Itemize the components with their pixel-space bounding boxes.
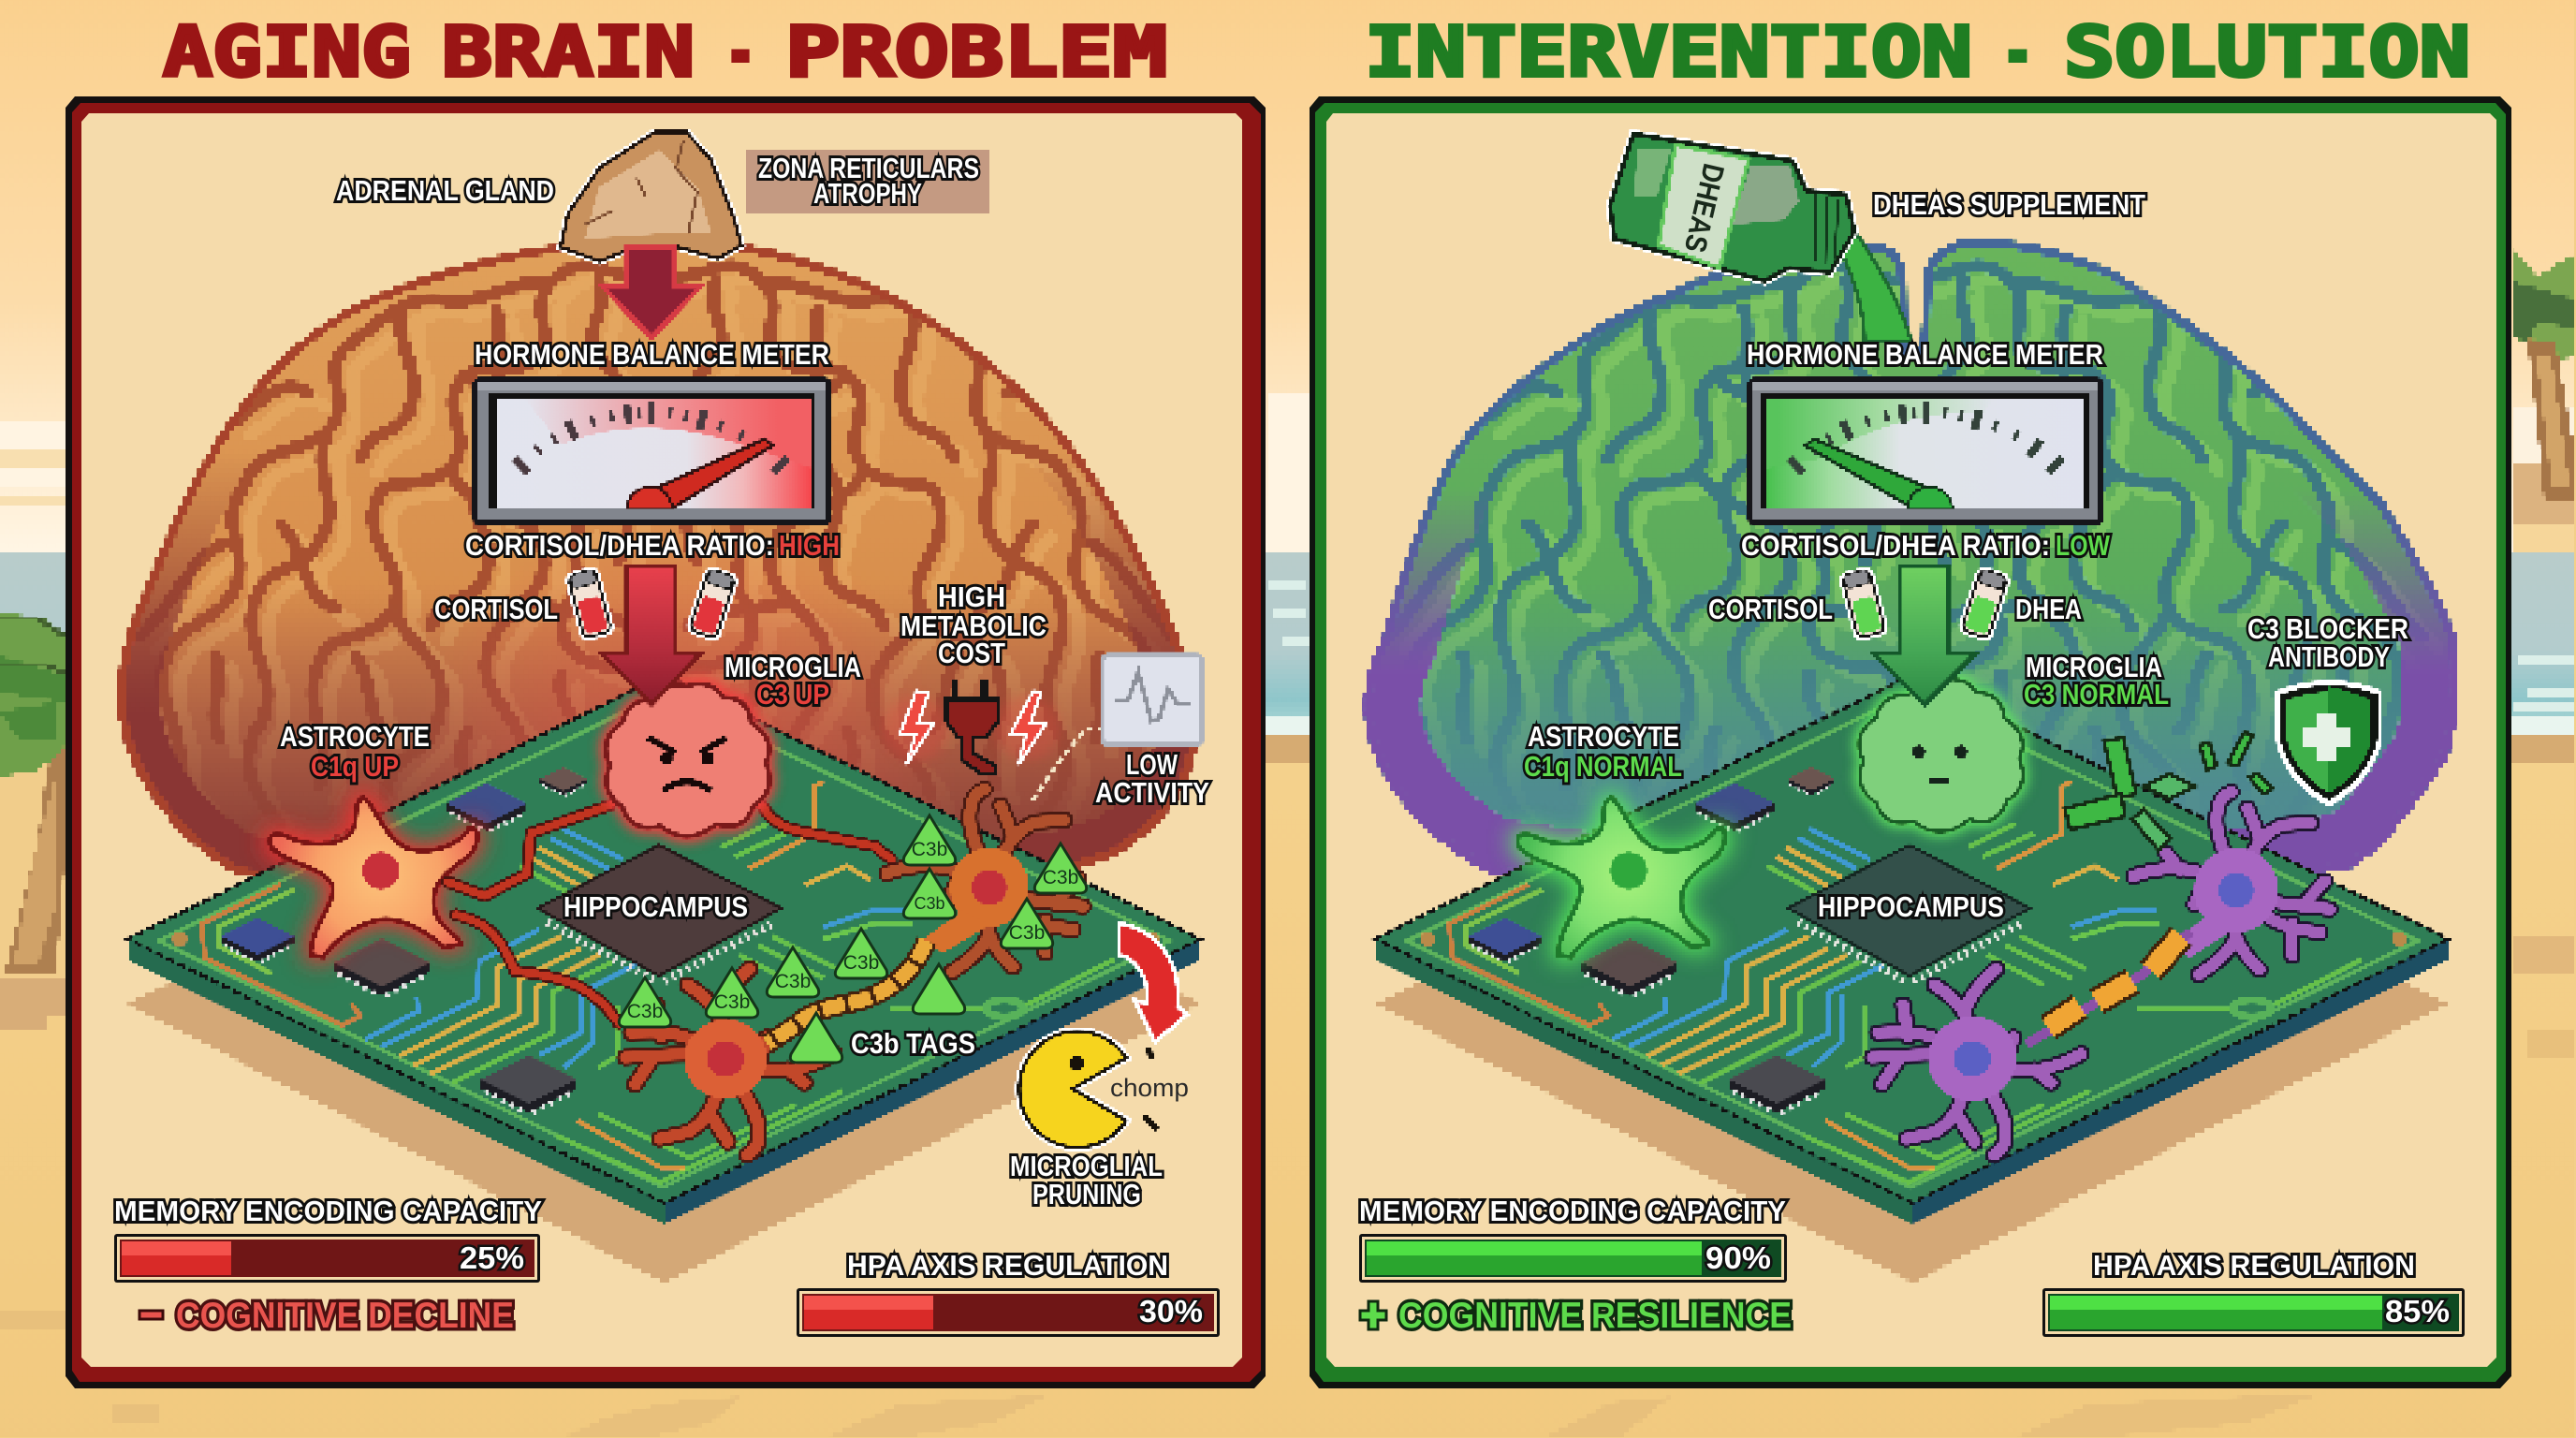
neuron: upper [2133,792,2330,975]
board shadow [1376,749,2448,1283]
icon: cortisol vial left [564,565,616,643]
text: low activity: ACTIVITY [1095,776,1209,809]
metric: memory encoding capacity 90%: MEMORY ENCODING CAPACITY [1359,1195,1786,1227]
text: c3 blocker antibody: C3 BLOCKER [2247,612,2408,645]
icon: pac-man microglia [1019,1031,1157,1148]
text: cortisol/dhea ratio high: HIGH [779,529,840,562]
text: C3b tags: C3b TAGS [851,1027,975,1060]
arrow: meter to microglia [602,566,700,704]
arrow: adrenal to meter [602,247,701,338]
neuron: upper [886,789,1083,972]
metric: hpa axis regulation 30%: 30% [1139,1294,1203,1328]
C3b tags: C3b [775,971,811,992]
text: microglia c3 up: C3 UP [756,678,829,711]
astrocyte: inflamed [271,798,477,957]
title: aging brain - problem: PROBLEM [785,12,1167,93]
arrow: meter to microglia [1874,566,1975,704]
icon: cortisol vial [1837,565,1890,643]
text: c3 blocker antibody [2247,612,2408,673]
icon: low activity monitor [1032,655,1202,800]
metric: hpa axis regulation 30% [797,1249,1220,1337]
text: cortisol: CORTISOL [434,593,558,625]
metric: memory encoding capacity 90%: 90% [1705,1240,1771,1275]
title: intervention - solution: INTERVENTION [1365,12,1972,93]
title: aging brain - problem: AGING [163,12,411,93]
panel: intervention solution [1310,96,2511,1388]
title: aging brain - problem [163,12,1167,93]
text: hormone balance meter: HORMONE BALANCE METER [475,338,829,371]
circuit board [1376,675,2448,1224]
icon: dhea vial [1956,565,2012,643]
board shadow [128,749,1200,1283]
text: high metabolic cost: METABOLIC [900,609,1046,642]
inflamed processes [447,804,891,1023]
text: microglial pruning: PRUNING [1032,1178,1141,1211]
text: astrocyte c1q normal: C1q NORMAL [1524,750,1682,783]
text: cognitive decline: COGNITIVE DECLINE [176,1296,514,1336]
text: cortisol/dhea ratio low: CORTISOL/DHEA RATIO: [1741,529,2050,562]
text: hippocampus: HIPPOCAMPUS [1818,890,2004,923]
title: intervention - solution: - [2002,12,2033,93]
text: high metabolic cost: HIGH [938,580,1005,613]
title: intervention - solution [1365,12,2470,93]
text: low activity: LOW [1126,748,1178,781]
text: cortisol/dhea ratio high: CORTISOL/DHEA RATIO: [465,529,774,562]
neuron: lower [1861,957,2096,1173]
healthy myelinated axon [2027,932,2190,1044]
damaged axon [768,941,927,1044]
C3b tags: C3b [912,839,947,860]
brain: green recovered [1364,238,2459,936]
text: microglia c3 up [724,651,861,711]
text: microglia c3 normal: C3 NORMAL [2024,678,2169,711]
panel: aging brain problem [66,96,1266,1388]
metric: hpa axis regulation 85%: 85% [2385,1294,2450,1328]
C3b tags: C3b [843,952,879,974]
text: microglia c3 up: MICROGLIA [724,651,861,683]
metric: hpa axis regulation 85% [2042,1249,2465,1337]
text: dhea: DHEA [2015,593,2082,625]
text: cortisol/dhea ratio low: LOW [2056,529,2111,562]
circuit board [128,675,1200,1224]
icon: legend tag [790,1013,842,1063]
metric: memory encoding capacity 90% [1359,1195,1787,1283]
C3b tags: C3b [1009,922,1045,944]
callout: zona reticularis atrophy [746,150,989,213]
text: dheas bottle label: DHEAS [1678,160,1731,256]
astrocyte: healthy [1518,798,1725,957]
text: astrocyte c1q normal: ASTROCYTE [1528,720,1679,753]
icon: plug and lightning [885,681,1060,773]
C3b tags: C3b [627,1001,663,1022]
panel frame [1310,96,2511,1388]
metric: hpa axis regulation 30%: HPA AXIS REGULATION [847,1249,1168,1282]
callout: zona reticularis atrophy: ATROPHY [813,177,922,210]
title: aging brain - problem: - [725,12,755,93]
text: high metabolic cost [900,580,1046,669]
icon: dheas bottle [1610,134,1911,342]
text: astrocyte c1q normal [1524,720,1682,783]
text: adrenal gland: ADRENAL GLAND [336,174,554,207]
C3b tags: C3b [714,991,750,1013]
icon: broken antibody fragments [2065,732,2273,850]
text: microglial pruning: MICROGLIAL [1010,1150,1163,1182]
text: astrocyte c1q up [280,720,430,783]
C3b tags: C3b [1043,867,1078,888]
title: intervention - solution: SOLUTION [2064,12,2470,93]
neuron: lower [614,957,849,1173]
text: cortisol: CORTISOL [1708,593,1833,625]
title: aging brain - problem: BRAIN [442,12,695,93]
text: hippocampus: HIPPOCAMPUS [564,890,748,923]
text: microglia c3 normal [2024,651,2169,711]
metric: memory encoding capacity 25% [114,1195,542,1283]
metric: memory encoding capacity 25%: MEMORY ENCODING CAPACITY [114,1195,542,1227]
hippocampus chip [538,845,781,981]
microglia: calm [1859,680,2023,831]
icon: left palm [0,613,66,974]
text: dheas supplement: DHEAS SUPPLEMENT [1873,188,2145,221]
hormone meter: low [1748,377,2103,525]
C3b tags [619,815,1087,1027]
text: hormone balance meter: HORMONE BALANCE METER [1747,338,2103,371]
arrow: pruning [1120,923,1187,1042]
icon: cortisol vial right [684,565,740,643]
hormone meter: high [473,377,831,525]
text: microglia c3 normal: MICROGLIA [2026,651,2162,683]
icon: adrenal gland [561,132,741,261]
text: astrocyte c1q up: C1q UP [311,750,399,783]
metric: hpa axis regulation 85%: HPA AXIS REGULATION [2093,1249,2415,1282]
text: microglial pruning [1010,1150,1163,1211]
brain: orange aged [118,240,1198,936]
icon: shield antibody [2276,680,2382,807]
icon: right palm [2511,245,2576,501]
callout: zona reticularis atrophy: ZONA RETICULARS [758,152,979,184]
text: astrocyte c1q up: ASTROCYTE [280,720,430,753]
microglia: angry [606,684,769,836]
C3b tags: C3b [914,894,945,913]
panel frame [66,96,1266,1388]
text: c3 blocker antibody: ANTIBODY [2268,640,2390,673]
hippocampus chip [1789,845,2029,981]
text: high metabolic cost: COST [938,637,1005,669]
metric: memory encoding capacity 25%: 25% [460,1240,524,1275]
text: chomp: chomp [1110,1074,1189,1102]
text: low activity [1095,748,1209,809]
text: cognitive resilience: COGNITIVE RESILIENCE [1398,1296,1792,1336]
